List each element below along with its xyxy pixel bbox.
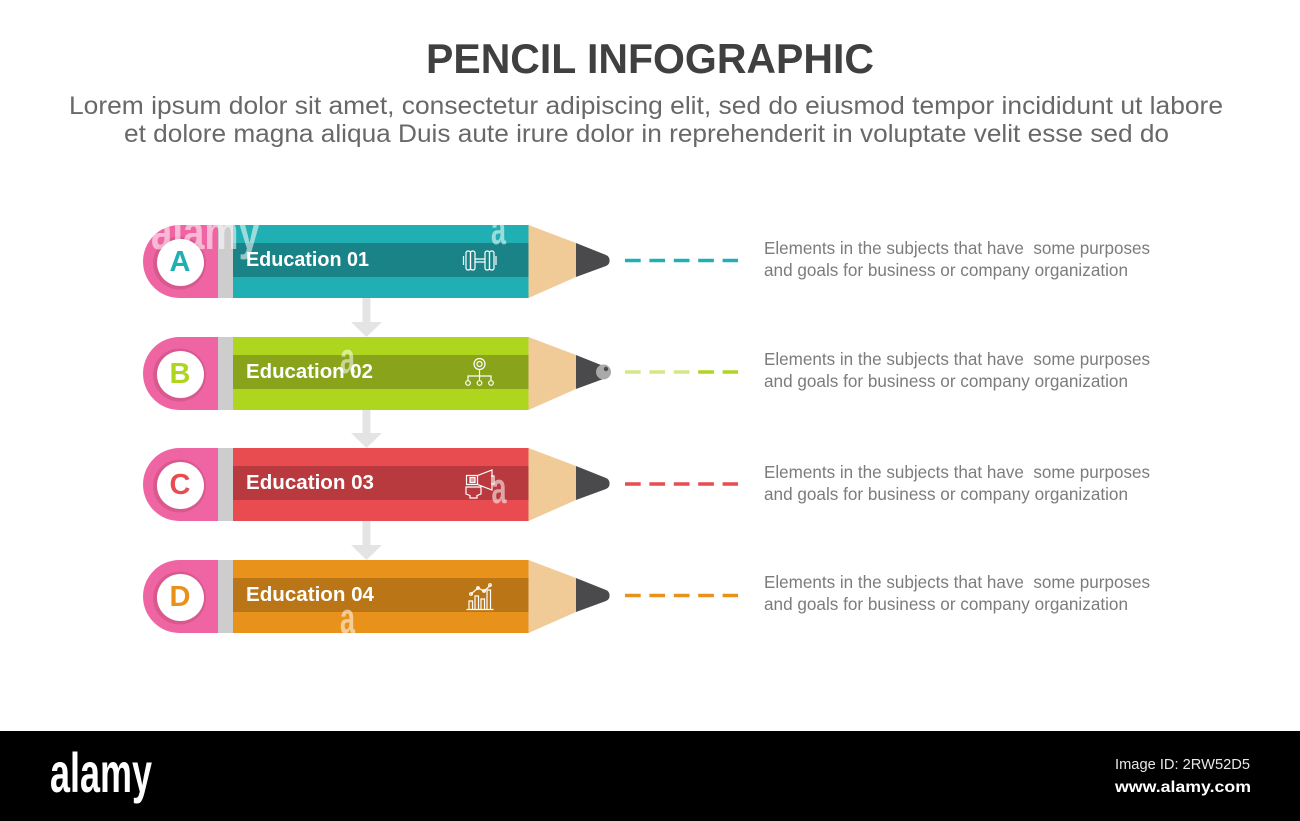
letter badge	[153, 460, 206, 512]
ferrule	[218, 337, 233, 410]
description B: and goals for business or company organization	[764, 371, 1128, 391]
dark band	[233, 466, 528, 500]
connector: B	[624, 369, 738, 375]
label: Education 01	[246, 249, 369, 271]
connector: C	[625, 482, 738, 486]
connector: A	[625, 259, 738, 262]
dark band	[233, 578, 528, 612]
letter badge: A	[170, 246, 191, 278]
lead	[576, 466, 610, 500]
pencil body	[233, 448, 528, 521]
wood tip	[528, 448, 576, 521]
description D	[764, 572, 1150, 614]
pencil D	[143, 560, 610, 643]
lead	[576, 243, 610, 277]
dark band	[233, 243, 528, 277]
arrow: B to C	[351, 410, 382, 448]
lead	[576, 578, 610, 612]
logo: alamy	[50, 741, 152, 804]
title: PENCIL INFOGRAPHIC	[426, 35, 874, 82]
arrow: C to D	[351, 521, 382, 560]
wood tip	[528, 225, 576, 298]
pencil B	[143, 334, 611, 410]
pencil C	[143, 448, 610, 521]
watermark fragment: alamy	[151, 204, 260, 260]
letter badge: D	[170, 581, 190, 613]
watermark fragment: a	[491, 205, 506, 254]
watermark fragment on lead	[596, 364, 611, 380]
description A	[764, 238, 1150, 280]
dark band	[233, 355, 528, 389]
icon: hierarchy	[466, 358, 493, 385]
description C: Elements in the subjects that have some purposes	[764, 462, 1150, 482]
subtitle text block: et dolore magna aliqua Duis aute irure dolor in reprehenderit in voluptate velit esse sed do	[124, 120, 1169, 148]
label: Education 02	[246, 361, 373, 383]
wood tip	[528, 337, 576, 410]
description C	[764, 462, 1150, 504]
description D: and goals for business or company organization	[764, 594, 1128, 614]
letter badge	[153, 236, 206, 290]
website: www.alamy.com	[1114, 779, 1251, 796]
connector: D	[625, 594, 738, 597]
pencil body	[233, 560, 528, 633]
icon: bar chart	[466, 584, 494, 610]
description A: Elements in the subjects that have some purposes	[764, 238, 1150, 258]
eraser	[143, 225, 218, 298]
pencil A	[143, 225, 610, 298]
eraser	[143, 448, 218, 521]
watermark fragment: a	[492, 464, 507, 513]
wood tip	[528, 560, 576, 633]
pencil body	[233, 225, 528, 298]
letter badge	[153, 348, 206, 402]
icon: megaphone	[466, 470, 494, 498]
label: Education 03	[246, 472, 374, 494]
description B	[764, 349, 1150, 391]
arrow: A to B	[351, 298, 382, 337]
letter badge: B	[170, 358, 190, 390]
watermark fragment: a	[340, 594, 355, 643]
ferrule	[218, 560, 233, 633]
label: Education 04	[246, 584, 375, 606]
eraser	[143, 337, 218, 410]
description D: Elements in the subjects that have some purposes	[764, 572, 1150, 592]
icon: dumbbell	[464, 251, 496, 270]
eraser	[143, 560, 218, 633]
watermark fragment: a	[340, 334, 355, 383]
subtitle text block	[69, 92, 1223, 148]
ferrule	[218, 448, 233, 521]
lead	[576, 355, 610, 389]
description C: and goals for business or company organization	[764, 484, 1128, 504]
description A: and goals for business or company organization	[764, 260, 1128, 280]
letter badge	[153, 572, 206, 624]
pencil body	[233, 337, 528, 410]
letter badge: C	[170, 469, 191, 501]
description B: Elements in the subjects that have some purposes	[764, 349, 1150, 369]
subtitle text block: Lorem ipsum dolor sit amet, consectetur adipiscing elit, sed do eiusmod tempor incididunt ut labore	[69, 92, 1223, 120]
image id: Image ID: 2RW52D5	[1115, 756, 1250, 773]
footer bar	[0, 731, 1300, 821]
ferrule	[218, 225, 233, 298]
